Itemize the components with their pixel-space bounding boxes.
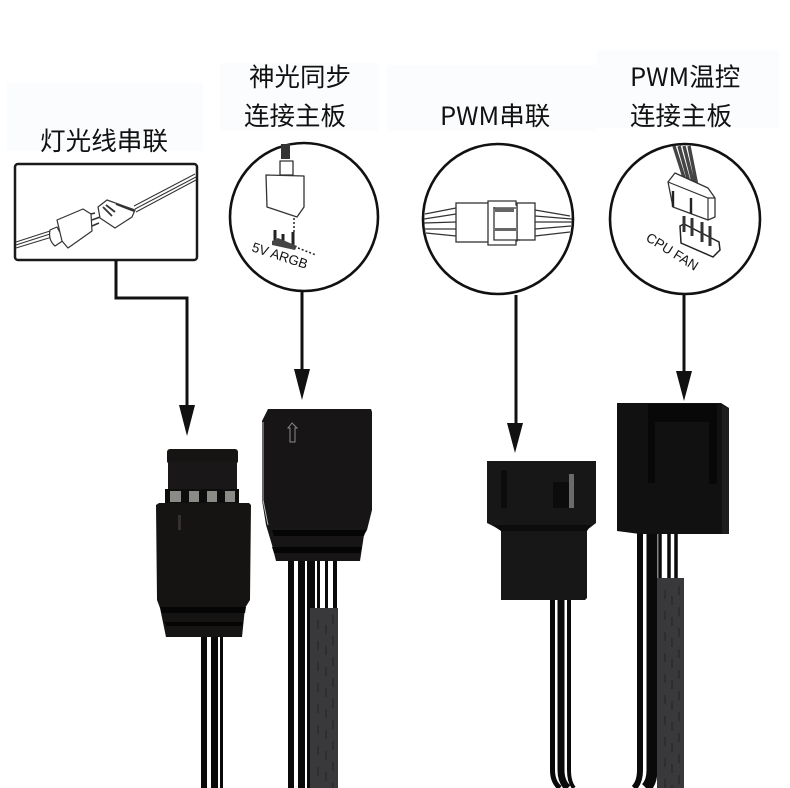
- heading: light cable daisy chain: 灯光线串联: [40, 121, 168, 158]
- connector: ARGB: [262, 409, 372, 788]
- arrow: CPU fan inset to connector: [676, 295, 692, 401]
- arrow: PWM inset to connector: [507, 295, 523, 453]
- connector: light cable: [156, 449, 251, 788]
- heading: PWM temperature control: PWM温控: [630, 57, 740, 94]
- arrow: ARGB inset to connector: [294, 290, 310, 400]
- heading: PWM daisy chain: PWM串联: [440, 96, 550, 133]
- heading: PWM temperature control: 连接主板: [630, 96, 732, 133]
- heading: ARGB sync: 神光同步: [249, 57, 351, 94]
- panel: ARGB inset: [230, 143, 378, 291]
- heading: ARGB sync: 连接主板: [244, 96, 346, 133]
- connector: PWM: [487, 461, 596, 788]
- panel: CPU fan inset: [610, 144, 760, 294]
- arrow: light cable to connector: [116, 260, 195, 436]
- panel: ARGB inset: 5V ARGB: [250, 240, 310, 272]
- heading: PWM temperature control: [630, 57, 740, 133]
- panel: PWM inset: [423, 144, 573, 294]
- panel: CPU fan inset: CPU FAN: [643, 230, 701, 274]
- connector: CPU fan: [617, 403, 729, 788]
- heading: ARGB sync: [244, 57, 351, 133]
- panel: light cable inset: [15, 164, 197, 260]
